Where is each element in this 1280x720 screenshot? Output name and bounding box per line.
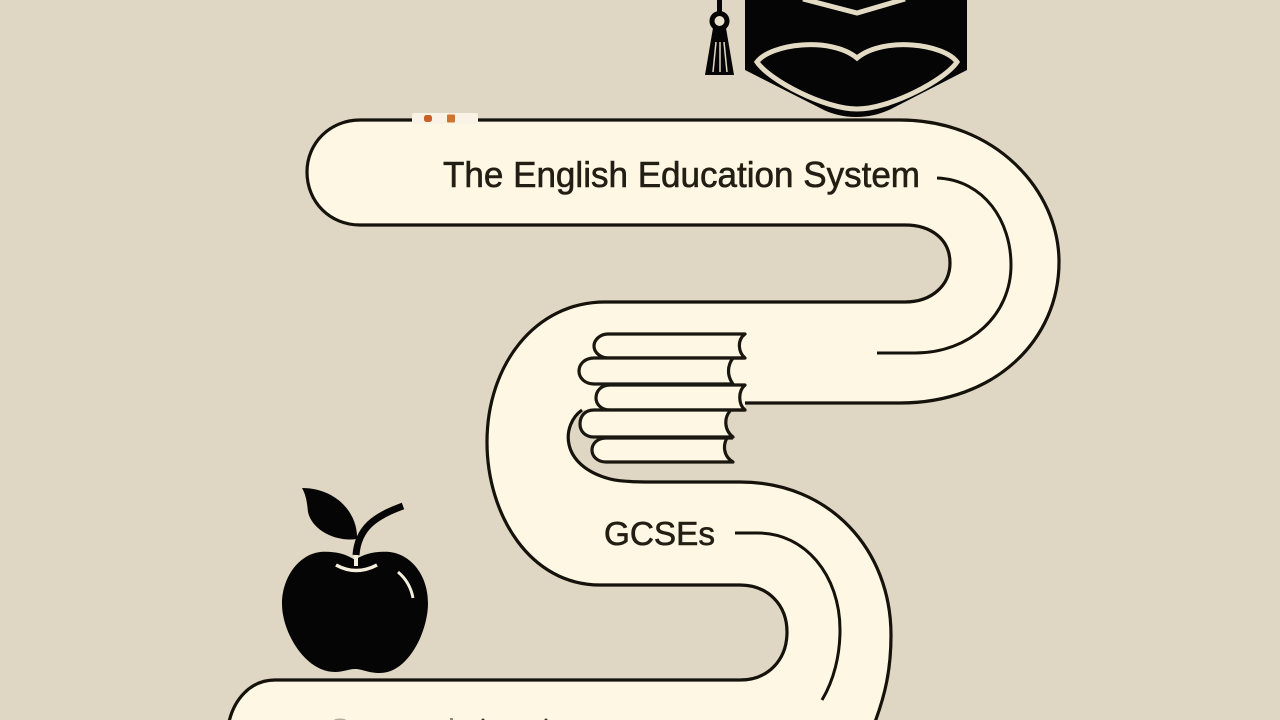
book 5 xyxy=(592,438,733,462)
book 1 xyxy=(594,334,745,358)
icon: stack of books xyxy=(579,334,745,462)
road start marker with two orange dots xyxy=(412,113,478,124)
book 3 xyxy=(596,385,745,410)
winding road path xyxy=(229,120,1059,720)
book 4 xyxy=(580,410,745,437)
title label: The English Education System xyxy=(443,154,920,195)
inner guide line: lower bend xyxy=(735,533,840,700)
inner guide line: upper bend xyxy=(877,178,1011,353)
icon: cap tassel xyxy=(705,0,734,75)
apple highlights xyxy=(336,565,377,570)
apple stem xyxy=(356,506,403,555)
GCSEs label: GCSEs xyxy=(604,515,715,552)
book 2 xyxy=(579,358,745,384)
icon: graduation cap xyxy=(705,0,967,117)
apple leaf xyxy=(302,488,357,539)
clipped label tops at bottom edge xyxy=(334,718,548,720)
icon: apple xyxy=(282,488,428,673)
